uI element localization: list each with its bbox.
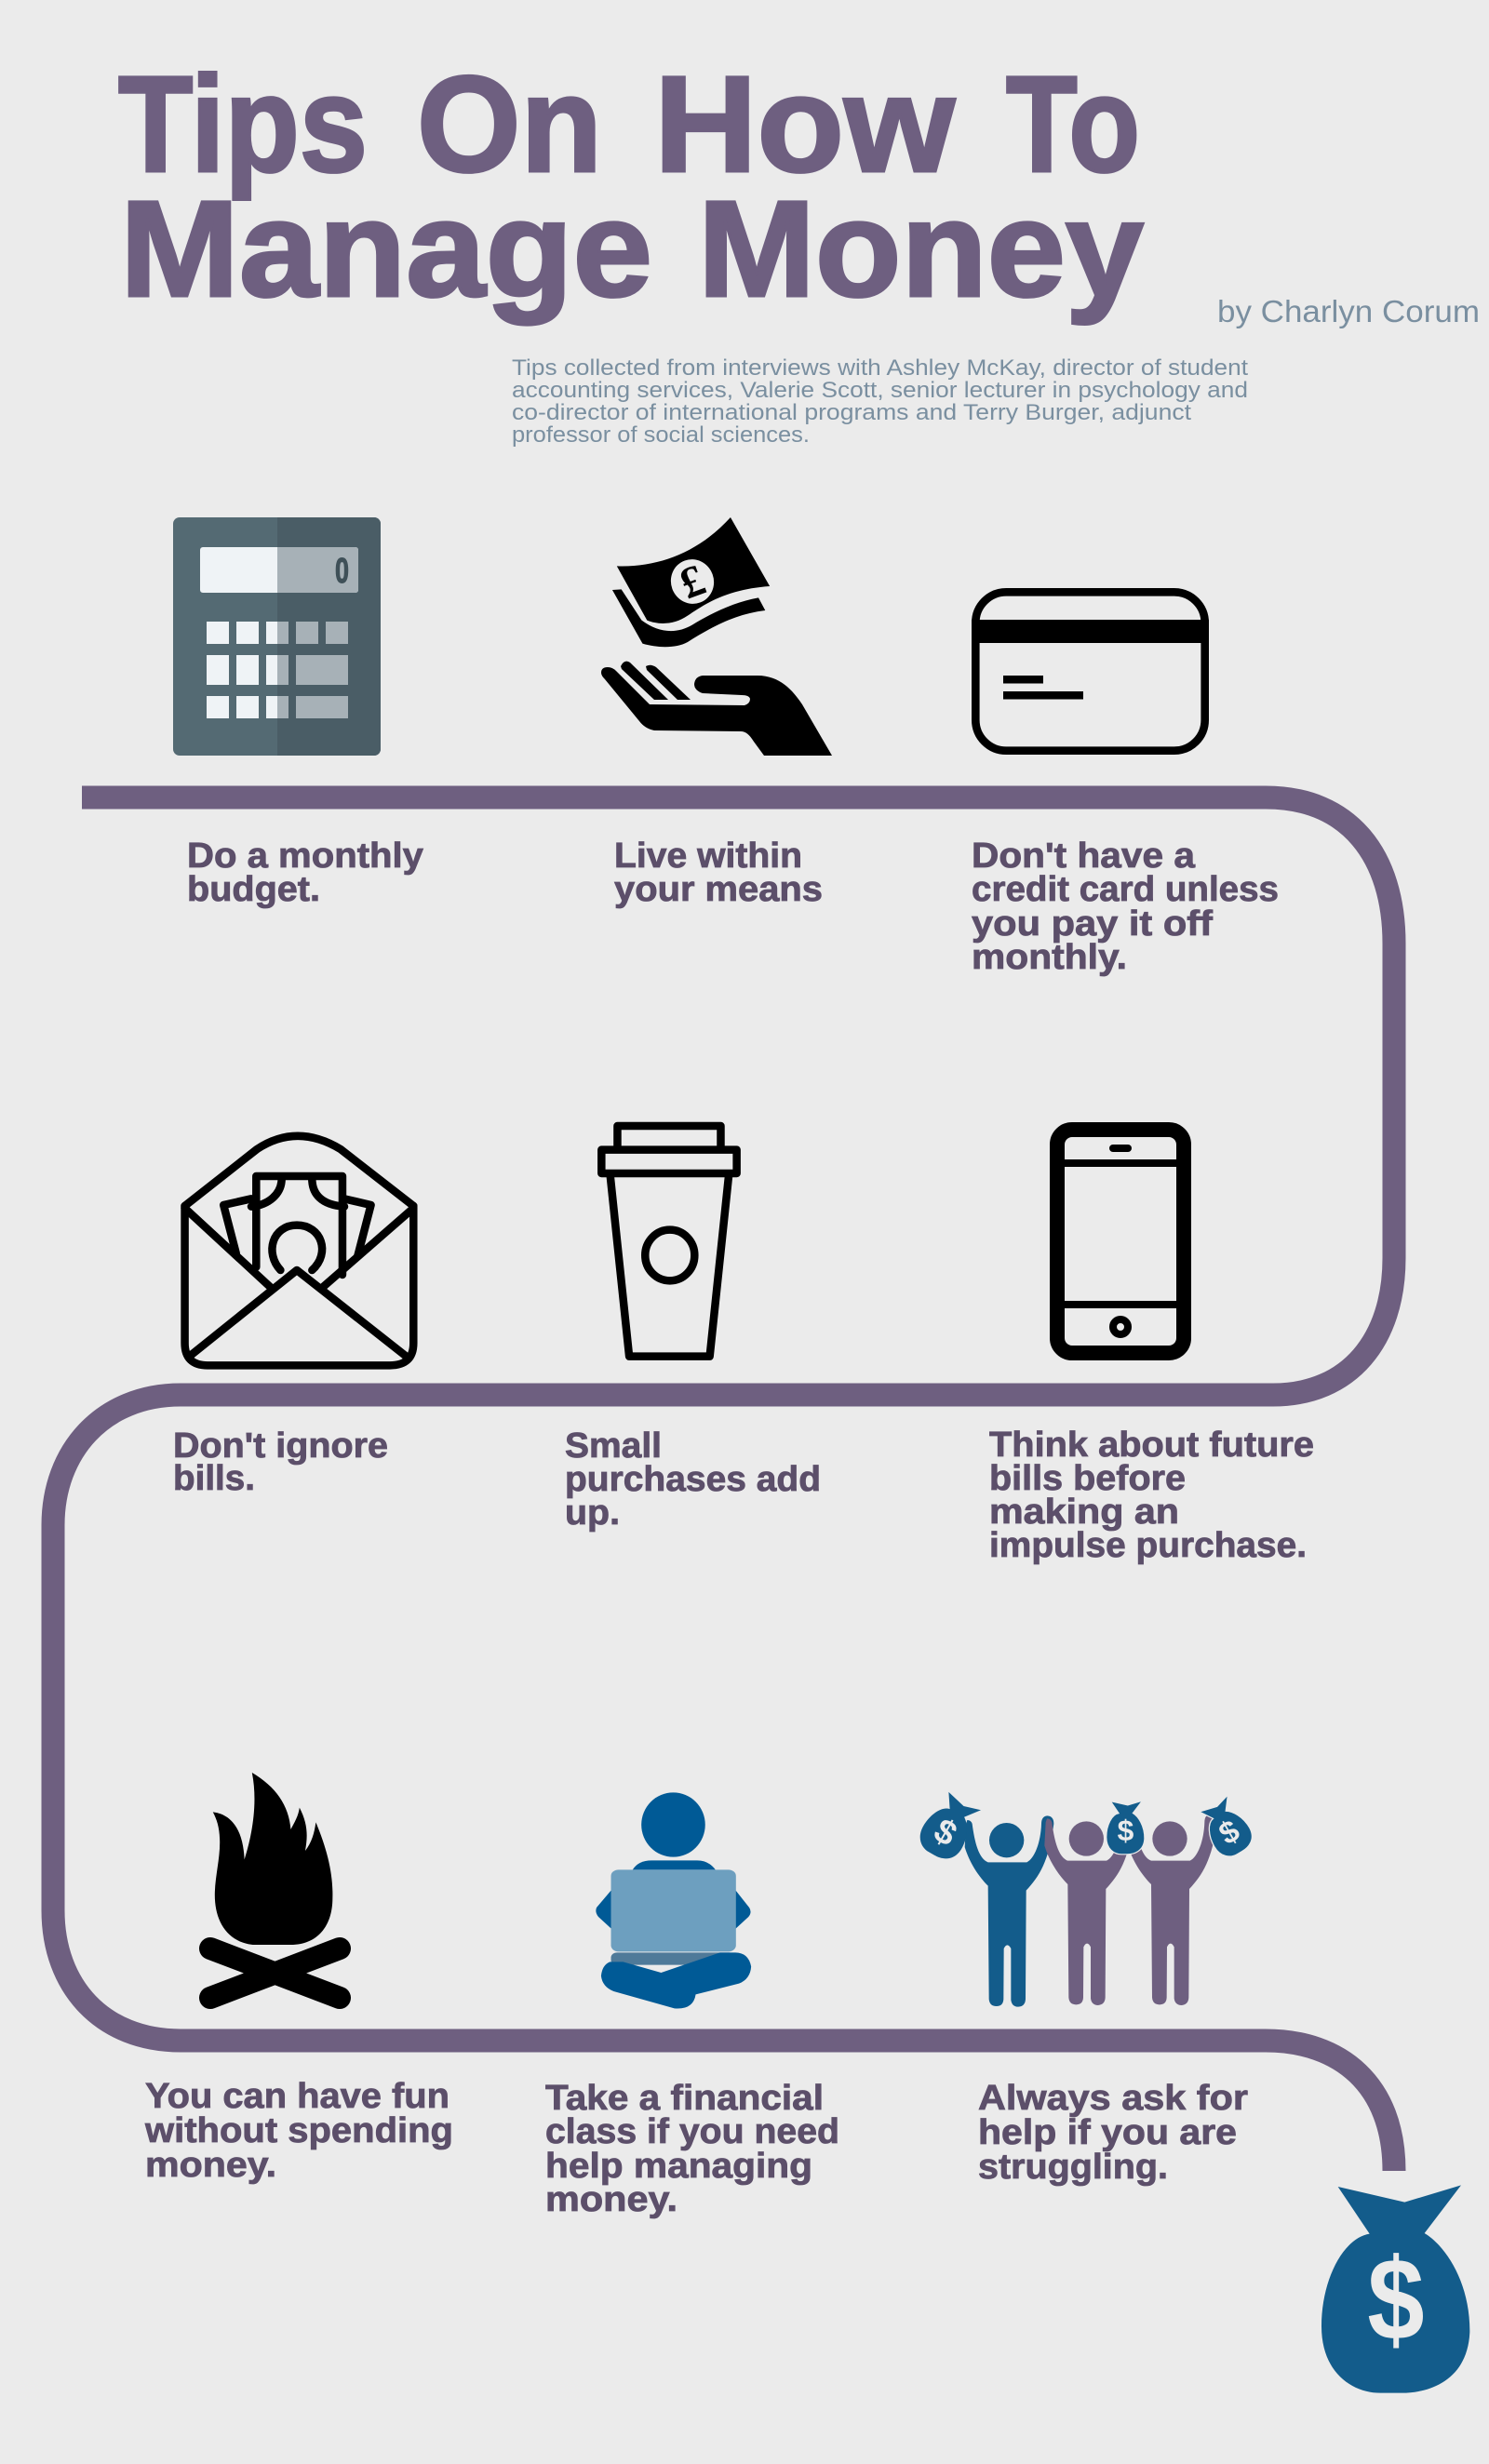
byline: by Charlyn Corum [1217,294,1480,328]
title: How [654,48,956,201]
label: ignore bills: bills. [173,1459,255,1498]
label: credit card advice: you pay it off [972,904,1213,944]
label: fun without spending: without spending [144,2111,453,2150]
title [118,48,1144,326]
title: On [417,48,602,201]
label: monthly budget [187,837,423,909]
person: left, blue [965,1815,1053,2007]
label: ask for help: Always ask for [978,2079,1248,2118]
intro text block: Tips collected from interviews with Ashley McKay, director of student [512,355,1248,381]
label: small purchases: Small [565,1426,662,1466]
label: ask for help: struggling. [978,2148,1168,2187]
label: financial class: Take a financial [545,2079,824,2118]
intro text block: accounting services, Valerie Scott, senior lecturer in psychology and [512,378,1248,403]
label: credit card advice [972,837,1279,977]
icon: large money bag: $ [1367,2233,1425,2364]
label: fun without spending: You can have fun [145,2077,449,2116]
label: credit card advice: credit card unless [972,870,1279,909]
icon: hand receiving money [601,517,832,756]
icon: smartphone [1057,1130,1184,1353]
money bag: middle [1107,1801,1145,1855]
label: live within means: Live within [614,837,802,876]
money bag: left: $ [928,1811,964,1854]
person: right, purple [1128,1815,1217,2005]
icon: takeaway cup [601,1126,737,1357]
label: small purchases [565,1426,821,1533]
label: live within means: your means [614,870,823,909]
title: Manage [120,173,652,326]
money bag: right: $ [1214,1814,1246,1852]
icon: envelope with money [185,1136,413,1365]
money bag: left [914,1789,983,1866]
label: future bills: bills before [989,1459,1186,1498]
money bag: right [1195,1794,1258,1862]
winding path line [53,797,1394,2171]
label: ask for help [978,2079,1248,2187]
label: financial class: help managing [545,2147,812,2186]
label: future bills: making an [989,1493,1179,1532]
intro text block: co-director of international programs and Terry Burger, adjunct [512,400,1191,425]
label: fun without spending: money. [145,2146,276,2185]
label: small purchases: up. [565,1493,620,1533]
label: future bills: impulse purchase. [989,1526,1307,1565]
label: monthly budget: budget. [187,870,320,909]
icon: calculator: 0 [335,552,349,591]
icon: person with laptop [596,1792,751,2008]
icon: hand receiving money: £ [674,555,712,609]
title: Tips [118,48,368,201]
intro text block [512,355,1248,448]
label: ignore bills [173,1426,388,1498]
label: fun without spending [144,2077,453,2185]
label: monthly budget: Do a monthly [187,837,423,876]
label: small purchases: purchases add [565,1460,821,1499]
label: financial class: class if you need [545,2112,839,2151]
title: To [1006,48,1140,201]
icon: three people holding money bags [914,1789,1258,2007]
label: financial class [545,2079,839,2219]
money bag: middle: $ [1118,1814,1134,1847]
intro text block: professor of social sciences. [512,422,810,448]
label: ask for help: help if you are [978,2113,1237,2152]
label: financial class: money. [545,2180,677,2219]
icon: calculator [173,517,381,756]
title: Money [698,173,1144,326]
label: credit card advice: monthly. [972,938,1127,977]
label: future bills: Think about future [989,1426,1314,1465]
person: middle, purple [1044,1815,1134,2005]
label: live within means [614,837,823,909]
label: ignore bills: Don't ignore [173,1426,388,1466]
label: credit card advice: Don't have a [972,837,1196,876]
icon: large money bag [1321,2185,1469,2393]
icon: campfire [210,1773,340,1998]
label: future bills [989,1426,1314,1565]
icon: credit card [972,592,1209,751]
